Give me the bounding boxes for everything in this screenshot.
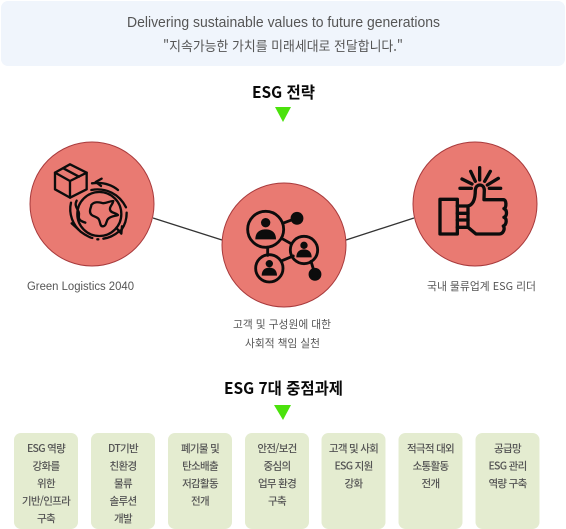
box 1: 기반/인프라: [22, 494, 71, 508]
box 1: ESG 역량: [27, 441, 66, 456]
box 2: DT기반: [108, 441, 139, 456]
circle: social responsibility: [222, 183, 346, 307]
box 1: [14, 433, 78, 529]
label: ESG leader: 국내 물류업계 ESG 리더: [427, 278, 536, 294]
box 3: 저감활동: [182, 476, 219, 491]
box 3: [168, 433, 232, 529]
box 2: 물류: [114, 476, 133, 491]
banner panel: [1, 1, 565, 66]
box 2: 친환경: [110, 458, 136, 474]
circle: green logistics: [30, 142, 154, 266]
box 5: 강화: [345, 476, 363, 491]
heading: ESG strategy: ESG 전략: [252, 79, 315, 103]
box 3: 탄소배출: [182, 458, 219, 474]
box 4: [245, 433, 309, 529]
banner Korean line: "지속가능한 가치를 미래세대로 전달합니다.": [163, 35, 403, 55]
box 5: [322, 433, 386, 529]
box 4: 업무 환경: [258, 476, 296, 491]
box 4: 안전/보건: [257, 441, 297, 456]
connector lines: [153, 218, 414, 240]
box 3: 폐기물 및: [181, 441, 219, 456]
box 7: ESG 관리: [488, 458, 527, 474]
label: green logistics: Green Logistics 2040: [27, 281, 134, 293]
box 1: 위한: [37, 476, 56, 491]
arrow: priorities: [274, 405, 291, 420]
label: social responsibility: 사회적 책임 실천: [245, 335, 320, 351]
box 2: [91, 433, 155, 529]
box 4: 구축: [268, 494, 287, 508]
task boxes: [14, 433, 540, 529]
heading: seven priorities: ESG 7대 중점과제: [224, 375, 343, 399]
box 6: 전개: [422, 476, 439, 491]
icon: people network: [248, 211, 320, 282]
label: social responsibility: [233, 316, 331, 351]
circle: ESG leader: [413, 142, 537, 266]
box 6: [398, 433, 462, 529]
box 3: 전개: [191, 494, 209, 508]
icon: thumbs up with rays: [440, 168, 506, 234]
box 2: 개발: [114, 511, 133, 526]
label: social responsibility: 고객 및 구성원에 대한: [233, 316, 331, 332]
box 5: ESG 지원: [334, 458, 373, 474]
box 7: 공급망: [494, 441, 522, 456]
banner English line: Delivering sustainable values to future generations: [127, 15, 440, 31]
box 6: 소통활동: [413, 458, 449, 474]
box 1: 강화를: [33, 458, 60, 474]
box 1: 구축: [37, 511, 56, 526]
box 4: 중심의: [264, 458, 290, 474]
arrow: strategy: [275, 107, 291, 122]
box 5: 고객 및 사회: [329, 441, 378, 456]
box 7: [476, 433, 540, 529]
icon: box and globe: [55, 164, 127, 239]
box 2: 솔루션: [110, 494, 136, 508]
box 6: 적극적 대외: [407, 441, 454, 456]
box 7: 역량 구축: [488, 476, 528, 491]
